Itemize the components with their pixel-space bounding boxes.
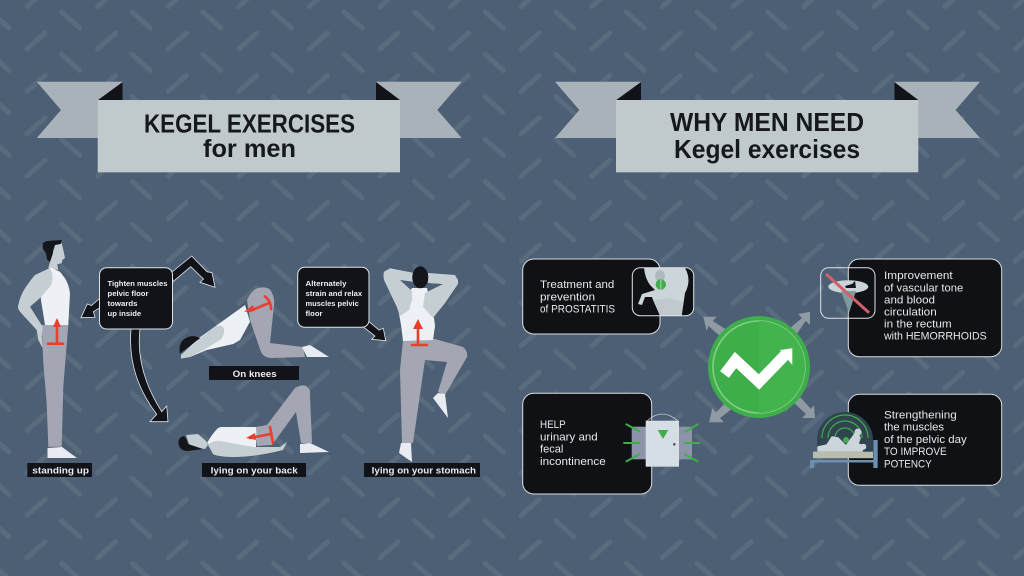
panel: prostatitis: [523, 259, 694, 334]
figure: standing man: [18, 240, 92, 477]
red arrow: [250, 296, 271, 311]
callout text: [306, 279, 363, 318]
callout text: pelvic floor: [108, 289, 149, 298]
panel text: [540, 419, 606, 468]
icon: toilet door: [623, 414, 700, 467]
panel text: [884, 409, 967, 470]
panel text: of vascular tone: [884, 282, 963, 294]
icon: prostate: [632, 268, 694, 316]
figure: lying on your stomach: [364, 266, 480, 477]
label: on knees: [209, 366, 299, 380]
callout: tighten muscles with arrows: [81, 256, 215, 422]
label: lying on your stomach: [364, 463, 480, 477]
red arrow: [412, 325, 427, 345]
banner: Kegel exercises for men: [37, 82, 462, 172]
panel: hemorrhoids: [821, 259, 1002, 357]
figure: on knees: [179, 287, 329, 380]
callout text: up inside: [108, 309, 141, 318]
panel text: [540, 279, 615, 316]
callout text: [108, 279, 168, 318]
panel text: [883, 270, 987, 343]
figure: lying on your back: [178, 385, 329, 477]
panel text: of the pelvic day: [884, 434, 967, 446]
panel text: TO IMPROVE: [884, 446, 947, 458]
panel text: Treatment and: [540, 279, 614, 291]
arrow: to lying on stomach: [363, 322, 386, 341]
heading: why men need: WHY MEN NEED: [670, 107, 864, 137]
zigzag arrow: [724, 348, 792, 382]
arrow: to standing man: [81, 298, 100, 318]
icon: crossed hemorrhoid: [821, 268, 875, 318]
label: standing up: [27, 463, 92, 477]
arrow: to incontinence: [709, 401, 733, 422]
icon: couple in bed: [810, 412, 878, 468]
label: standing up: standing up: [32, 466, 89, 476]
arrow: to lying on back: [131, 329, 168, 422]
arrow: to on knees: [172, 256, 215, 287]
label: lying on your stomach: lying on your stomach: [372, 466, 476, 476]
panel text: circulation: [884, 307, 937, 319]
callout text: towards: [108, 299, 138, 308]
red arrow: [250, 427, 273, 443]
panel text: of PROSTATITIS: [540, 304, 615, 316]
callout text: floor: [306, 309, 323, 318]
subheading: for men: for men: [203, 135, 296, 163]
red arrow: [48, 321, 63, 344]
banner: why men need Kegel exercises: [555, 82, 980, 172]
panel text: Improvement: [884, 270, 954, 282]
callout text: Tighten muscles: [108, 279, 168, 288]
arrow: to hemorrhoids: [789, 312, 810, 335]
panel text: Strengthening: [884, 409, 957, 421]
callout: alternately strain and relax: [298, 267, 386, 341]
panel text: and blood: [884, 294, 935, 306]
label: on knees: On knees: [233, 369, 277, 380]
panel text: POTENCY: [884, 458, 932, 470]
label: lying on your back: lying on your back: [211, 466, 298, 476]
arrow: to potency: [794, 397, 815, 418]
arrow: to prostatitis: [703, 317, 727, 337]
panel text: urinary and: [540, 432, 598, 444]
icon: green growth circle: [708, 316, 810, 418]
panel: urinary and fecal incontinence: [523, 393, 700, 494]
callout text: strain and relax: [306, 289, 363, 298]
subheading: Kegel exercises: Kegel exercises: [674, 134, 860, 164]
panel text: in the rectum: [884, 319, 952, 331]
panel text: HELP: [540, 419, 566, 431]
panel: improve potency: [810, 394, 1002, 485]
panel text: incontinence: [540, 456, 606, 468]
panel text: the muscles: [884, 422, 944, 434]
heading: Kegel exercises: KEGEL EXERCISES: [144, 108, 355, 138]
callout text: Alternately: [306, 279, 347, 288]
panel text: with HEMORRHOIDS: [883, 331, 987, 343]
callout text: muscles pelvic: [306, 299, 359, 308]
label: lying on your back: [202, 463, 306, 477]
panel text: fecal: [540, 444, 563, 456]
panel text: prevention: [540, 292, 595, 304]
